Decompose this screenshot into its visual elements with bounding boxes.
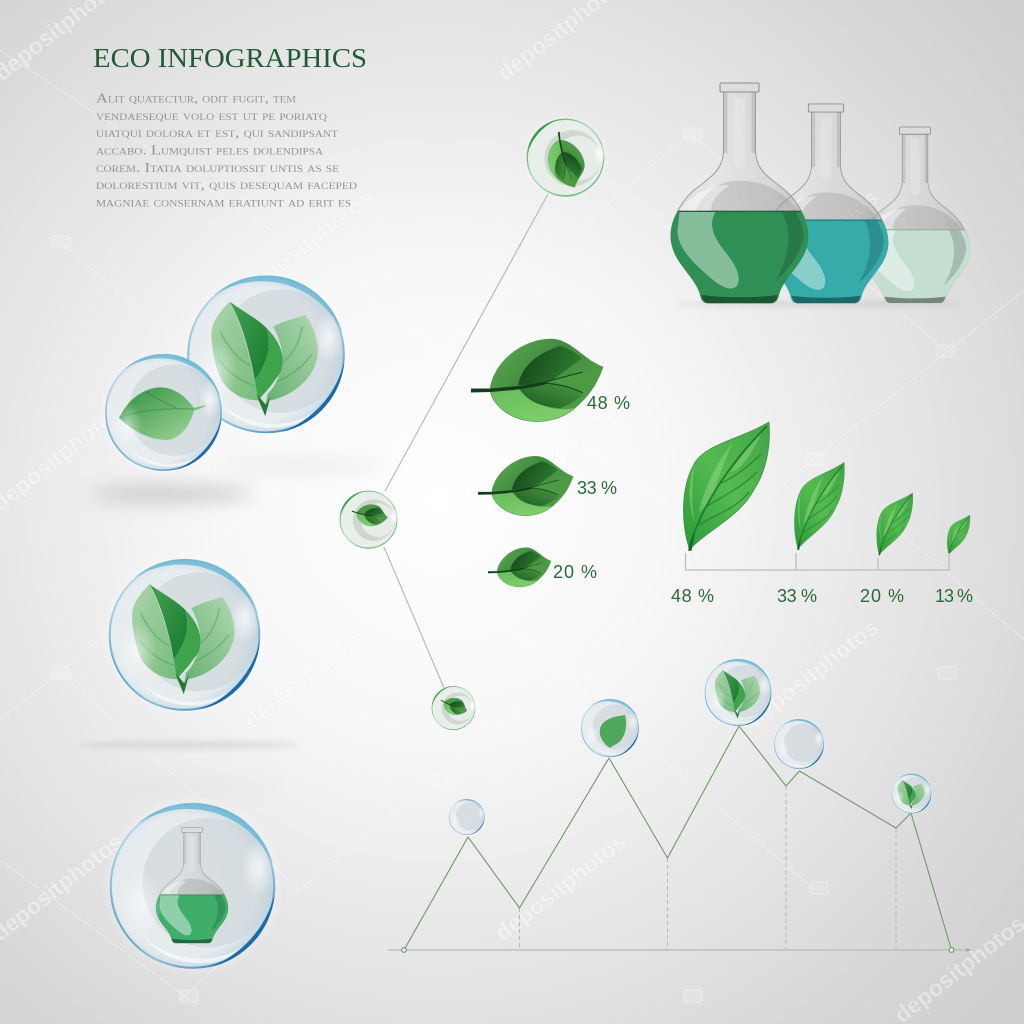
bubble: single leaf <box>99 348 228 477</box>
leaf: growth 20 percent <box>877 493 913 555</box>
leaf: growth 13 percent <box>947 515 970 555</box>
green bubble: bottom node <box>429 683 478 733</box>
intro text block: corem. Itatia doluptiossit untis as se <box>96 160 340 175</box>
intro text block: vendaeseque volo est ut pe poriatq <box>96 108 328 123</box>
intro text block: dolorestium vit, quis desequam faceped <box>96 177 358 192</box>
intro text block: uiatqui dolora et est, qui sandipsant <box>96 125 339 140</box>
intro text block: Alit quatectur, odit fugit, tem <box>96 90 296 106</box>
shadows under bubbles <box>76 461 390 791</box>
label: growth 33 percent: 33 % <box>777 586 817 606</box>
label: 20 percent: 20 % <box>553 562 597 582</box>
green bubble: top node <box>522 114 609 201</box>
infographic canvas: depositphotos <box>239 616 380 734</box>
chart bubble: single leaf <box>578 696 642 760</box>
intro text block <box>96 90 358 210</box>
label: growth 48 percent: 48 % <box>671 586 714 606</box>
label: 48 percent: 48 % <box>587 393 630 413</box>
flask: green <box>671 83 808 303</box>
infographic canvas: depositphotos <box>490 398 631 516</box>
leaf: growth 33 percent <box>794 462 844 549</box>
chart drop lines <box>520 786 896 950</box>
chart line <box>404 726 952 950</box>
bubble: two leaves medium <box>101 551 268 719</box>
chart bubble: empty medium <box>772 716 826 772</box>
leaf: growth 48 percent <box>683 422 769 550</box>
flasks group <box>671 83 970 305</box>
chart axis <box>388 948 972 952</box>
flask: teal <box>764 104 888 303</box>
infographic canvas: depositphotos <box>490 828 631 946</box>
label: growth 20 percent: 20 % <box>860 586 904 606</box>
infographic canvas: depositphotos <box>742 184 883 302</box>
connector lines <box>384 194 548 688</box>
intro text block: magniae consernam eratiunt ad erit es <box>96 194 351 210</box>
chart bubble: two leaves small <box>890 772 934 816</box>
label: 33 percent: 33 % <box>577 478 617 498</box>
leaf: 20 percent <box>488 548 551 587</box>
chart bubble: two leaves large <box>701 656 775 729</box>
chart bubble: empty small <box>447 797 486 837</box>
green bubble: middle node <box>336 487 401 552</box>
bubble: two leaves large <box>179 268 353 441</box>
leaf: 33 percent <box>478 456 573 516</box>
infographic canvas: depositphotos <box>237 184 378 302</box>
label: growth 13 percent: 13 % <box>935 586 973 606</box>
chart end points <box>402 948 954 952</box>
leaf bar axis <box>686 553 949 570</box>
line chart <box>388 656 972 952</box>
flask: pale <box>860 127 970 303</box>
leaf: 48 percent <box>471 339 603 422</box>
infographic canvas: depositphotos <box>742 614 883 732</box>
title: ECO INFOGRAPHICS <box>93 43 367 73</box>
bubble: flask <box>101 795 284 977</box>
intro text block: accabo. Lumquist peles dolendipsa <box>96 142 324 158</box>
